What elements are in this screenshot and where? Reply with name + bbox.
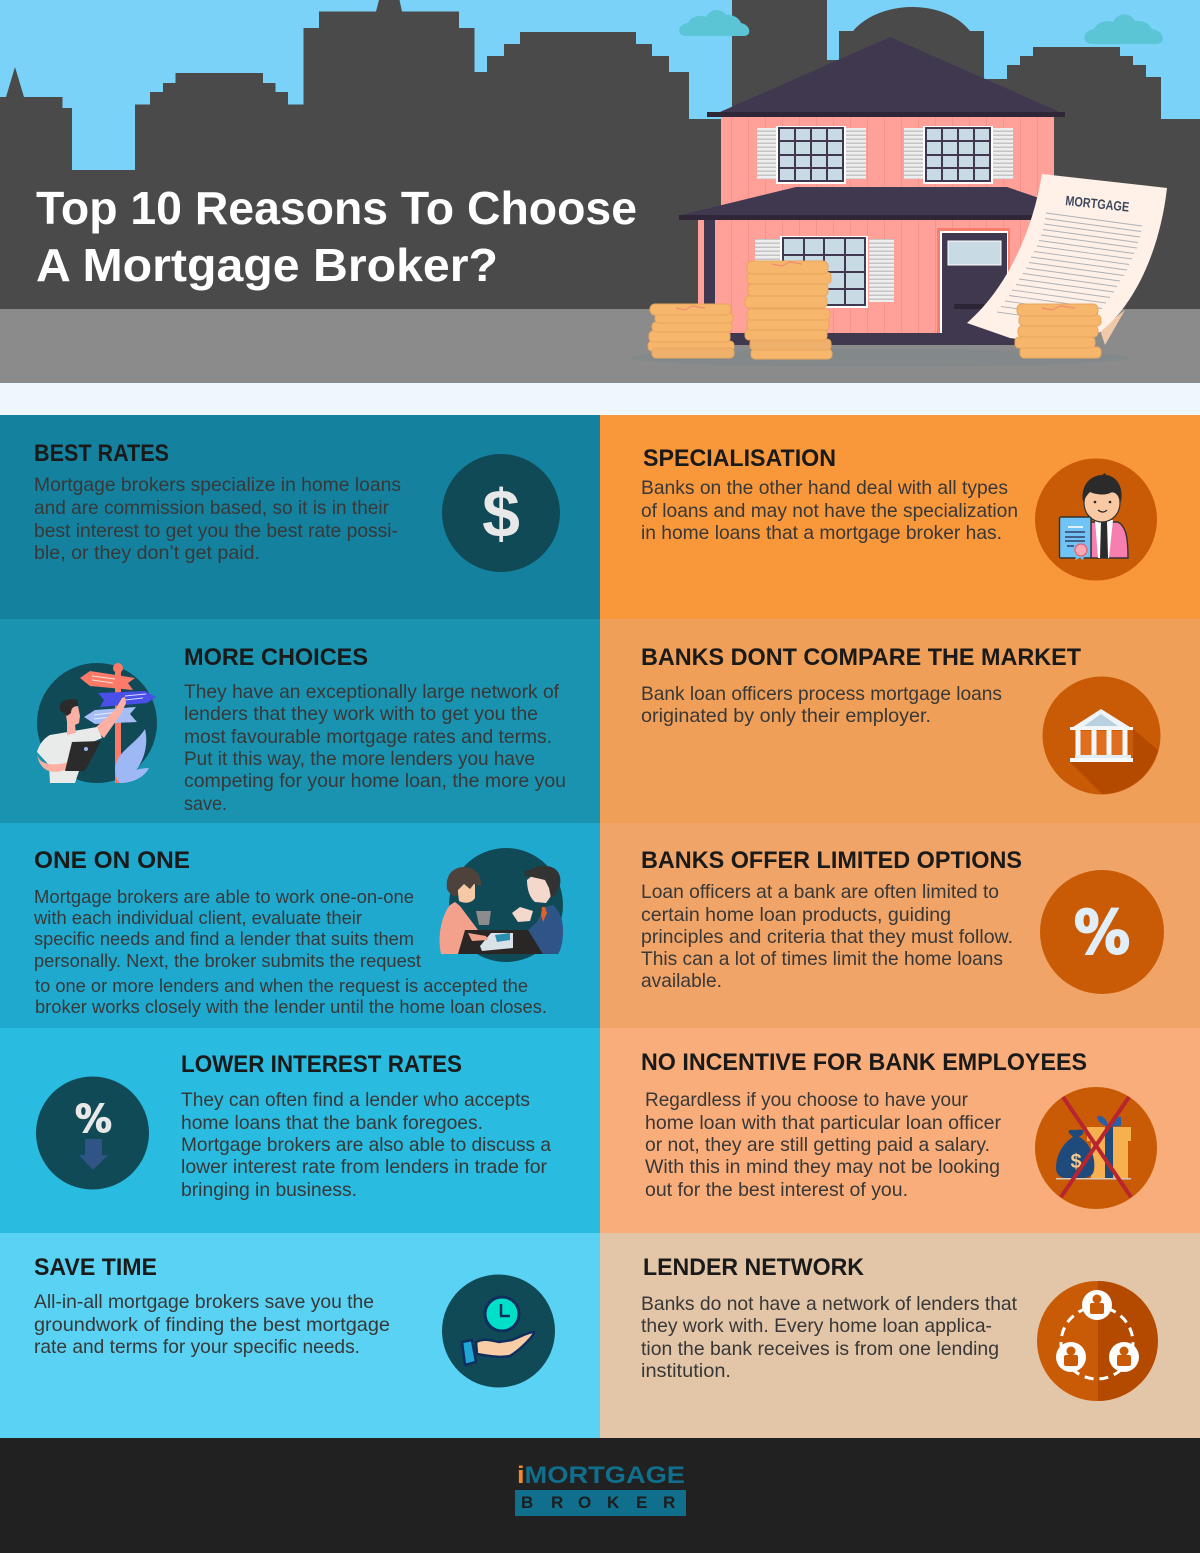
text: specialisation: Banks on the other hand deal with all types xyxy=(641,477,1008,499)
logo: O xyxy=(578,1493,591,1512)
text: one on one: to one or more lenders and when the request is accepted the xyxy=(35,975,528,996)
icon: clock over hand xyxy=(442,1274,555,1388)
text: one on one: personally. Next, the broker submits the request xyxy=(34,950,421,971)
text: banks offer limited options: principles and criteria that they must follow. xyxy=(641,926,1013,948)
text: lender network: tion the bank receives is from one lending xyxy=(641,1338,999,1360)
icon: person at signpost xyxy=(37,663,157,783)
text: specialisation xyxy=(641,477,1018,544)
text: best rates: best interest to get you the best rate possi- xyxy=(34,520,398,542)
text: more choices: save. xyxy=(184,793,227,815)
coin stack left xyxy=(648,304,734,358)
title: Top 10 Reasons To Choose xyxy=(36,182,637,234)
text: one on one: Mortgage brokers are able to work one-on-one xyxy=(34,886,414,907)
paper heading: MORTGAGE xyxy=(1065,193,1130,215)
icon: percent: % xyxy=(1074,898,1130,968)
logo: R xyxy=(663,1493,675,1512)
icon: network of people xyxy=(1037,1281,1158,1401)
text: save time: groundwork of finding the best mortgage xyxy=(34,1314,390,1336)
icon: two people meeting xyxy=(440,848,563,962)
text: no incentive: or not, they are still getting paid a salary. xyxy=(645,1134,990,1156)
text: banks offer limited options: certain home loan products, guiding xyxy=(641,904,951,926)
sky xyxy=(0,0,1200,383)
logo: iMORTGAGE xyxy=(517,1462,685,1489)
panel: save time xyxy=(0,1233,600,1438)
text: best rates xyxy=(34,474,401,564)
text: one on one xyxy=(33,886,547,1017)
text: lender network: institution. xyxy=(641,1360,731,1382)
footer xyxy=(0,1438,1200,1553)
header scene xyxy=(0,0,1200,383)
text: lender network: they work with. Every home loan applica- xyxy=(641,1315,992,1337)
text: save time: rate and terms for your specific needs. xyxy=(34,1336,360,1358)
coin stack middle xyxy=(745,261,832,359)
road xyxy=(0,309,1200,383)
mortgage paper xyxy=(967,174,1167,345)
panel: lender network xyxy=(600,1233,1200,1438)
text: banks offer limited options: Loan officers at a bank are often limited to xyxy=(641,881,999,903)
paper lines xyxy=(997,213,1142,325)
text: lower interest rates: They can often find a lender who accepts xyxy=(181,1089,530,1111)
text: more choices: lenders that they work with to get you the xyxy=(184,703,538,725)
logo xyxy=(515,1462,686,1516)
panel: banks dont compare the market xyxy=(600,619,1200,823)
logo: R xyxy=(551,1493,563,1512)
text: more choices: Put it this way, the more lenders you have xyxy=(184,748,535,770)
icon: crossed out money and gift xyxy=(1035,1087,1157,1209)
heading: no incentive: NO INCENTIVE FOR BANK EMPLOYEES xyxy=(641,1049,1087,1076)
icon: bank building xyxy=(1042,676,1160,794)
heading: specialisation: SPECIALISATION xyxy=(643,445,836,472)
panel: lower interest rates xyxy=(0,1028,600,1233)
panel: more choices xyxy=(0,619,600,823)
icon: dollar xyxy=(442,454,560,572)
text: lower interest rates: Mortgage brokers are also able to discuss a xyxy=(181,1134,551,1156)
text: more choices: They have an exceptionally large network of xyxy=(184,681,560,703)
text: save time xyxy=(34,1291,390,1358)
text: more choices: competing for your home loan, the more you xyxy=(184,770,566,792)
heading: banks offer limited options: BANKS OFFER LIMITED OPTIONS xyxy=(641,847,1022,874)
icon: percent with down arrow xyxy=(36,1076,149,1190)
text: no incentive: out for the best interest of you. xyxy=(645,1179,908,1201)
panel: one on one xyxy=(0,823,600,1028)
text: lower interest rates: home loans that the bank foregoes. xyxy=(181,1112,483,1134)
logo: K xyxy=(607,1493,620,1512)
text: lower interest rates xyxy=(181,1089,551,1201)
title: A Mortgage Broker? xyxy=(36,239,498,291)
logo: E xyxy=(636,1493,647,1512)
upper left window xyxy=(757,126,866,184)
text: one on one: specific needs and find a lender that suits them xyxy=(34,928,414,949)
icon: percent xyxy=(1040,870,1164,994)
text: one on one: with each individual client, evaluate their xyxy=(33,907,362,928)
text: more choices xyxy=(184,681,566,815)
heading: banks dont compare: BANKS DONT COMPARE THE MARKET xyxy=(641,644,1081,671)
panel: best rates xyxy=(0,415,600,619)
panel: specialisation xyxy=(600,415,1200,619)
text: lower interest rates: lower interest rate from lenders in trade for xyxy=(181,1156,548,1178)
text: no incentive: Regardless if you choose to have your xyxy=(645,1089,968,1111)
heading: save time: SAVE TIME xyxy=(34,1254,157,1281)
heading: lower interest rates: LOWER INTEREST RATES xyxy=(181,1051,462,1078)
text: banks offer limited options: available. xyxy=(641,970,722,992)
text: banks offer limited options: This can a lot of times limit the home loans xyxy=(641,948,1003,970)
text: specialisation: of loans and may not have the specialization xyxy=(641,500,1018,522)
title xyxy=(36,182,637,291)
lower wall xyxy=(698,220,1043,333)
heading: best rates: BEST RATES xyxy=(34,440,169,467)
text: no incentive xyxy=(645,1089,1002,1201)
lower window xyxy=(755,236,894,308)
text: banks offer limited options xyxy=(641,881,1013,992)
panel: no incentive for bank employees xyxy=(600,1028,1200,1233)
icon: dollar: $ xyxy=(482,476,520,552)
road shadow xyxy=(630,349,1130,367)
coin stack right xyxy=(1015,304,1101,358)
heading: more choices: MORE CHOICES xyxy=(184,644,368,671)
porch roof xyxy=(677,187,1045,216)
cloud left xyxy=(679,10,749,36)
house xyxy=(677,37,1065,345)
text: no incentive: With this in mind they may not be looking xyxy=(645,1156,1000,1178)
cloud right xyxy=(1084,14,1163,44)
text: specialisation: in home loans that a mortgage broker has. xyxy=(641,522,1002,544)
text: banks dont compare: originated by only their employer. xyxy=(641,705,931,727)
door xyxy=(937,228,1010,333)
logo: B xyxy=(521,1493,533,1512)
city skyline silhouette xyxy=(0,0,1200,320)
heading: lender network: LENDER NETWORK xyxy=(643,1254,865,1281)
icon: percent with down arrow: % xyxy=(75,1097,112,1141)
text: no incentive: home loan with that particular loan officer xyxy=(645,1112,1002,1134)
text: lender network: Banks do not have a network of lenders that xyxy=(641,1293,1018,1315)
text: one on one: broker works closely with the lender until the home loan closes. xyxy=(35,996,547,1017)
foundation xyxy=(729,333,1030,345)
upper wall xyxy=(721,117,1054,217)
icon: crossed out money and gift: $ xyxy=(1070,1151,1082,1173)
text: lower interest rates: bringing in business. xyxy=(181,1179,357,1201)
text: banks dont compare: Bank loan officers process mortgage loans xyxy=(641,683,1002,705)
panel: banks offer limited options xyxy=(600,823,1200,1028)
icon: broker with certificate xyxy=(1035,458,1157,580)
heading: one on one: ONE ON ONE xyxy=(34,847,190,874)
text: save time: All-in-all mortgage brokers save you the xyxy=(34,1291,374,1313)
upper right window xyxy=(904,126,1013,184)
porch post xyxy=(704,220,715,310)
text: more choices: most favourable mortgage rates and terms. xyxy=(184,726,552,748)
main roof xyxy=(720,37,1060,112)
text: best rates: ble, or they don’t get paid. xyxy=(34,542,260,564)
text: best rates: Mortgage brokers specialize in home loans xyxy=(34,474,401,496)
text: banks dont compare xyxy=(641,683,1002,727)
text: lender network xyxy=(641,1293,1018,1382)
text: best rates: and are commission based, so it is in their xyxy=(34,497,389,519)
